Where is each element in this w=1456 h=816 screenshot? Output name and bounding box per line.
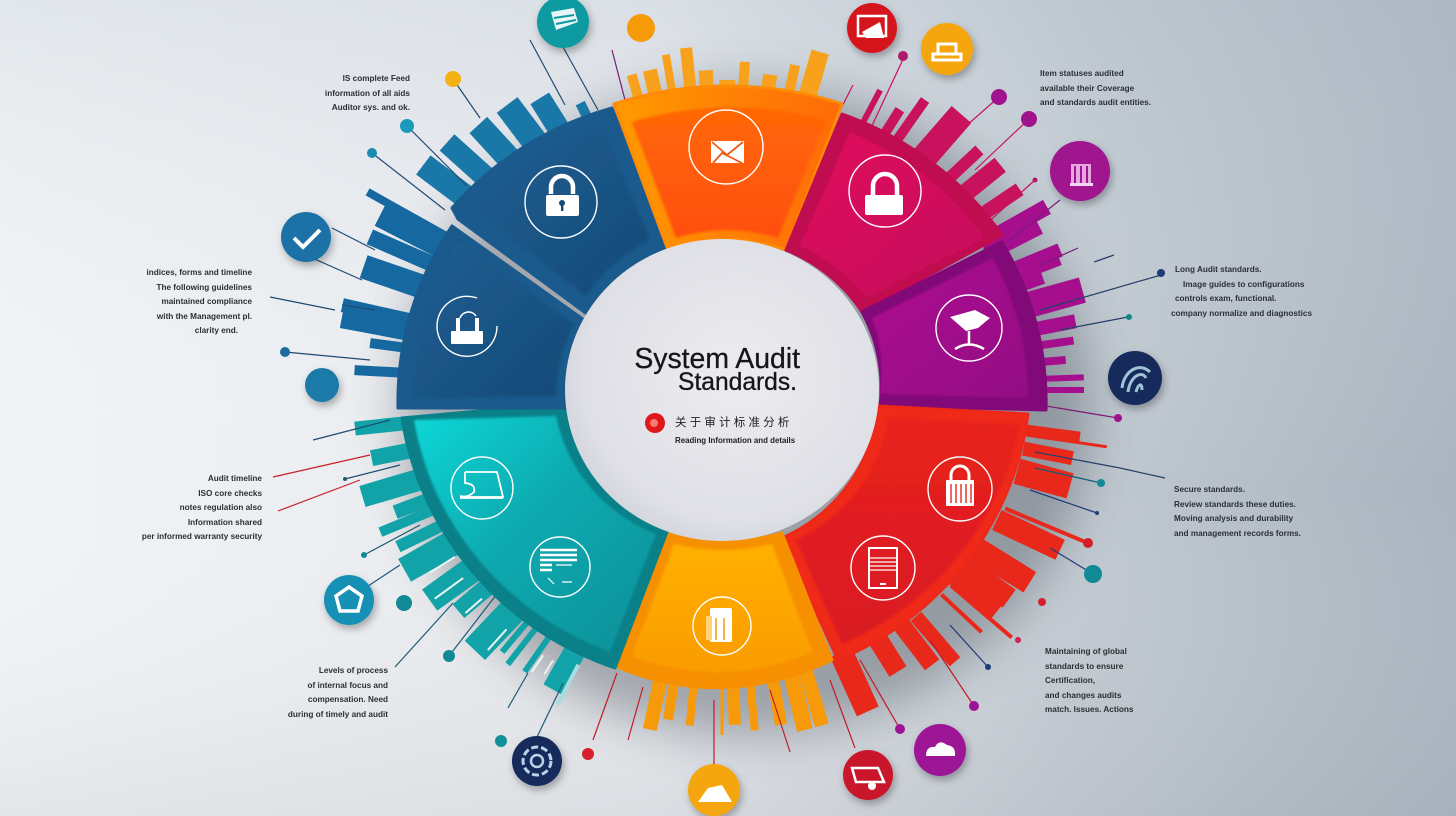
connector lines	[270, 40, 1165, 765]
icon: padlock blue	[525, 166, 597, 238]
segment: blue upper	[452, 108, 668, 314]
segment: orange bottom	[615, 533, 832, 688]
bars: orange top	[627, 47, 829, 124]
text block: left middle: Audit timeline ISO core checks notes regulation also Information shared per informed warranty security	[142, 474, 262, 541]
bars: purple and crimson	[854, 89, 1086, 393]
text block: lower right: Secure standards. Review standards these duties. Moving analysis and durability and management records forms.	[1174, 485, 1301, 538]
subtitle: Reading Information and details	[675, 436, 795, 445]
text block: top left: IS complete Feed information of all aids Auditor sys. and ok.	[325, 74, 410, 112]
subtitle	[675, 416, 795, 445]
badge: yellow bottom	[688, 764, 740, 816]
segment: teal	[402, 403, 667, 668]
subtitle: 关于审计标准分析	[675, 417, 793, 429]
text block: bottom left: Levels of process of internal focus and compensation. Need during of timely and audit	[288, 666, 388, 719]
segment: purple	[862, 242, 1046, 410]
badge: teal top	[537, 0, 589, 48]
badge: navy	[1108, 351, 1162, 405]
icons in segments	[437, 110, 1002, 655]
segment: blue lower	[398, 226, 584, 408]
icon: text lines	[530, 537, 590, 597]
badge: red bottom	[843, 750, 893, 800]
bars: red	[830, 425, 1107, 716]
segment: red	[782, 406, 1028, 660]
bars: orange bottom	[643, 661, 829, 735]
red center dot	[645, 413, 665, 433]
icon: tablet	[851, 536, 915, 600]
badges	[281, 0, 1162, 816]
text block: bottom right: Maintaining of global standards to ensure Certification, and changes audits match. Issues. Actions	[1045, 647, 1133, 714]
icon: document	[693, 597, 751, 655]
badge: check	[281, 212, 331, 262]
panel: ring segments	[398, 86, 1046, 688]
segment: crimson	[786, 114, 1002, 312]
icon: mail	[689, 110, 763, 184]
icon: laptop	[451, 457, 513, 519]
bars: blue upper	[416, 92, 600, 223]
ring shadow	[400, 85, 1090, 735]
icon: lock crimson	[849, 155, 921, 227]
badge: yellow top	[921, 23, 973, 75]
badge: purple bottom	[914, 724, 966, 776]
badge: purple	[1050, 141, 1110, 201]
bars: blue lower	[340, 188, 457, 378]
center disc	[565, 239, 879, 541]
badge: red top	[847, 3, 897, 53]
text block: top right: Item statuses audited available their Coverage and standards audit entities.	[1040, 69, 1151, 107]
text block: left: indices, forms and timeline The following guidelines maintained compliance with the Management pl. clarity end.	[146, 268, 252, 335]
title: Standards.	[678, 369, 797, 396]
icon: chair	[936, 295, 1002, 361]
title: System Audit	[634, 343, 800, 375]
title	[634, 343, 800, 396]
badge: teal left	[324, 575, 374, 625]
badge: navy bottom	[512, 736, 562, 786]
text block: right: Long Audit standards. Image guides to configurations controls exam, functional. company normalize and diagnostics	[1171, 265, 1312, 318]
bars: teal	[354, 415, 587, 706]
icon: router	[437, 296, 497, 356]
icon: lock red	[928, 457, 992, 521]
segment: orange top	[614, 86, 842, 250]
small dots	[280, 14, 1165, 760]
